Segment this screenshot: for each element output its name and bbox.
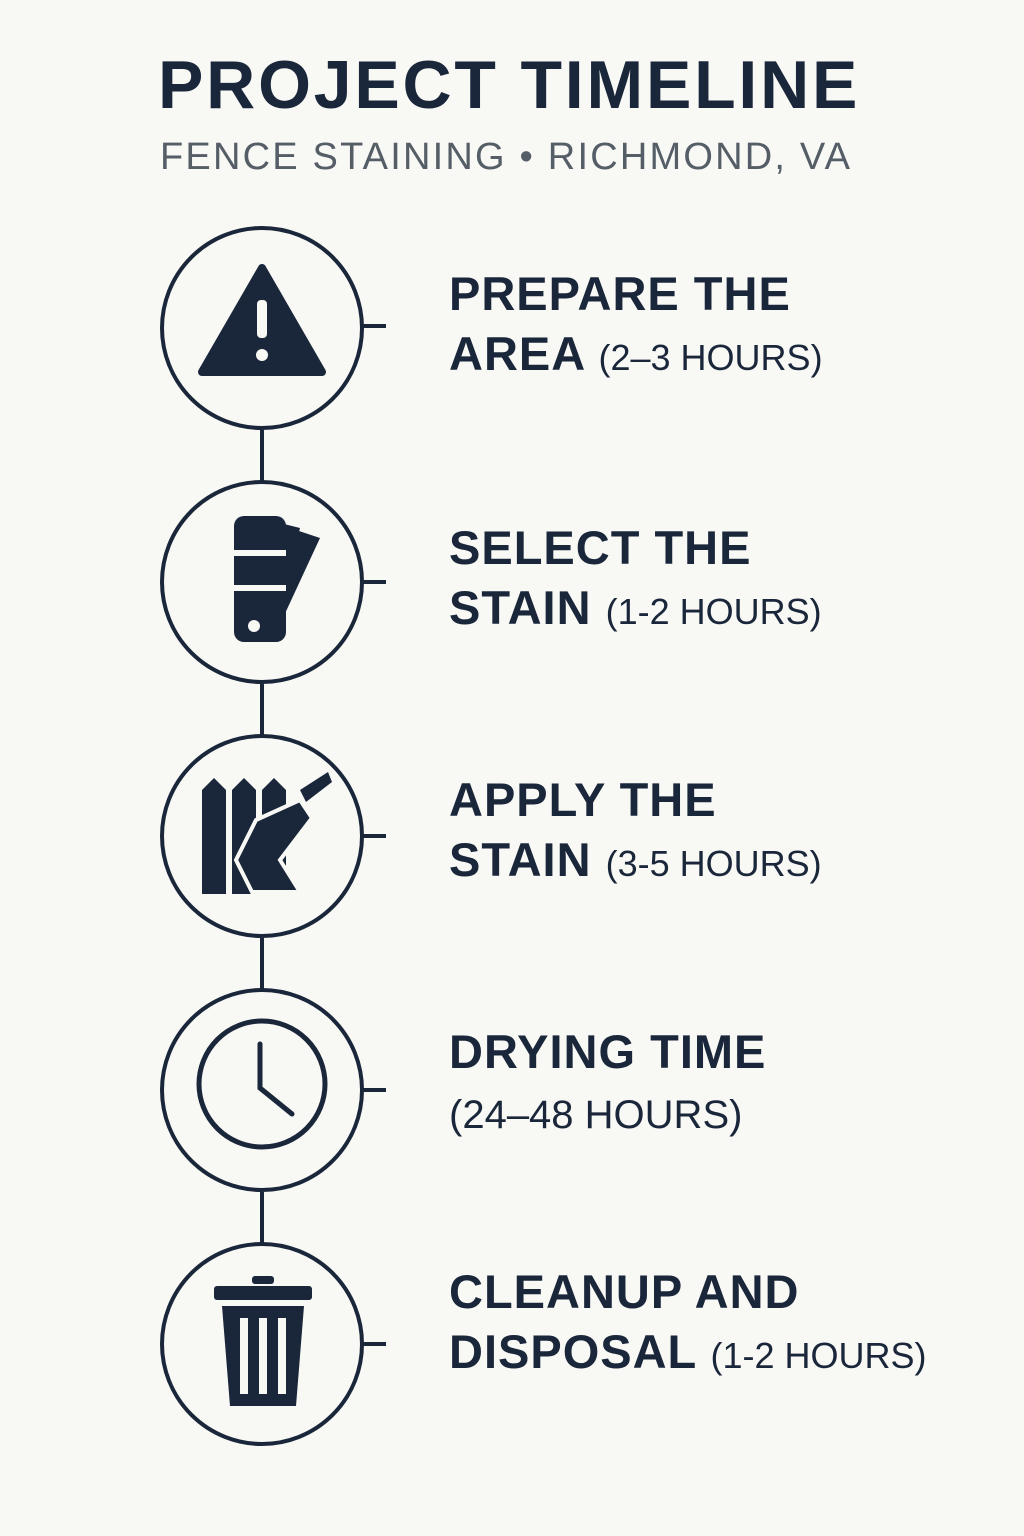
step 1 text: AREA (2–3 HOURS) (449, 327, 823, 380)
icon: trash can (214, 1276, 312, 1406)
step 2 text (449, 521, 822, 634)
step 3 text: STAIN (3-5 HOURS) (449, 833, 822, 886)
step 5 text (449, 1265, 926, 1378)
step 2 text: STAIN (1-2 HOURS) (449, 581, 822, 634)
step 2 text: SELECT THE (449, 521, 751, 574)
step 4 text: DRYING TIME (449, 1025, 766, 1078)
step 1 text: PREPARE THE (449, 267, 791, 320)
step 5 text: DISPOSAL (1-2 HOURS) (449, 1325, 926, 1378)
icon: fence and brush (202, 772, 332, 894)
step 5 text: CLEANUP AND (449, 1265, 799, 1318)
icon: warning (202, 268, 322, 372)
title: PROJECT TIMELINE (158, 47, 860, 123)
step 3 text: APPLY THE (449, 773, 717, 826)
step 4 text (449, 1025, 766, 1137)
step 4 text: (24–48 HOURS) (449, 1093, 742, 1137)
step 3 text (449, 773, 822, 886)
icon: clock (199, 1021, 325, 1147)
step 1 text (449, 267, 823, 380)
icon: swatches (234, 516, 320, 642)
subtitle: FENCE STAINING • RICHMOND, VA (160, 136, 852, 178)
